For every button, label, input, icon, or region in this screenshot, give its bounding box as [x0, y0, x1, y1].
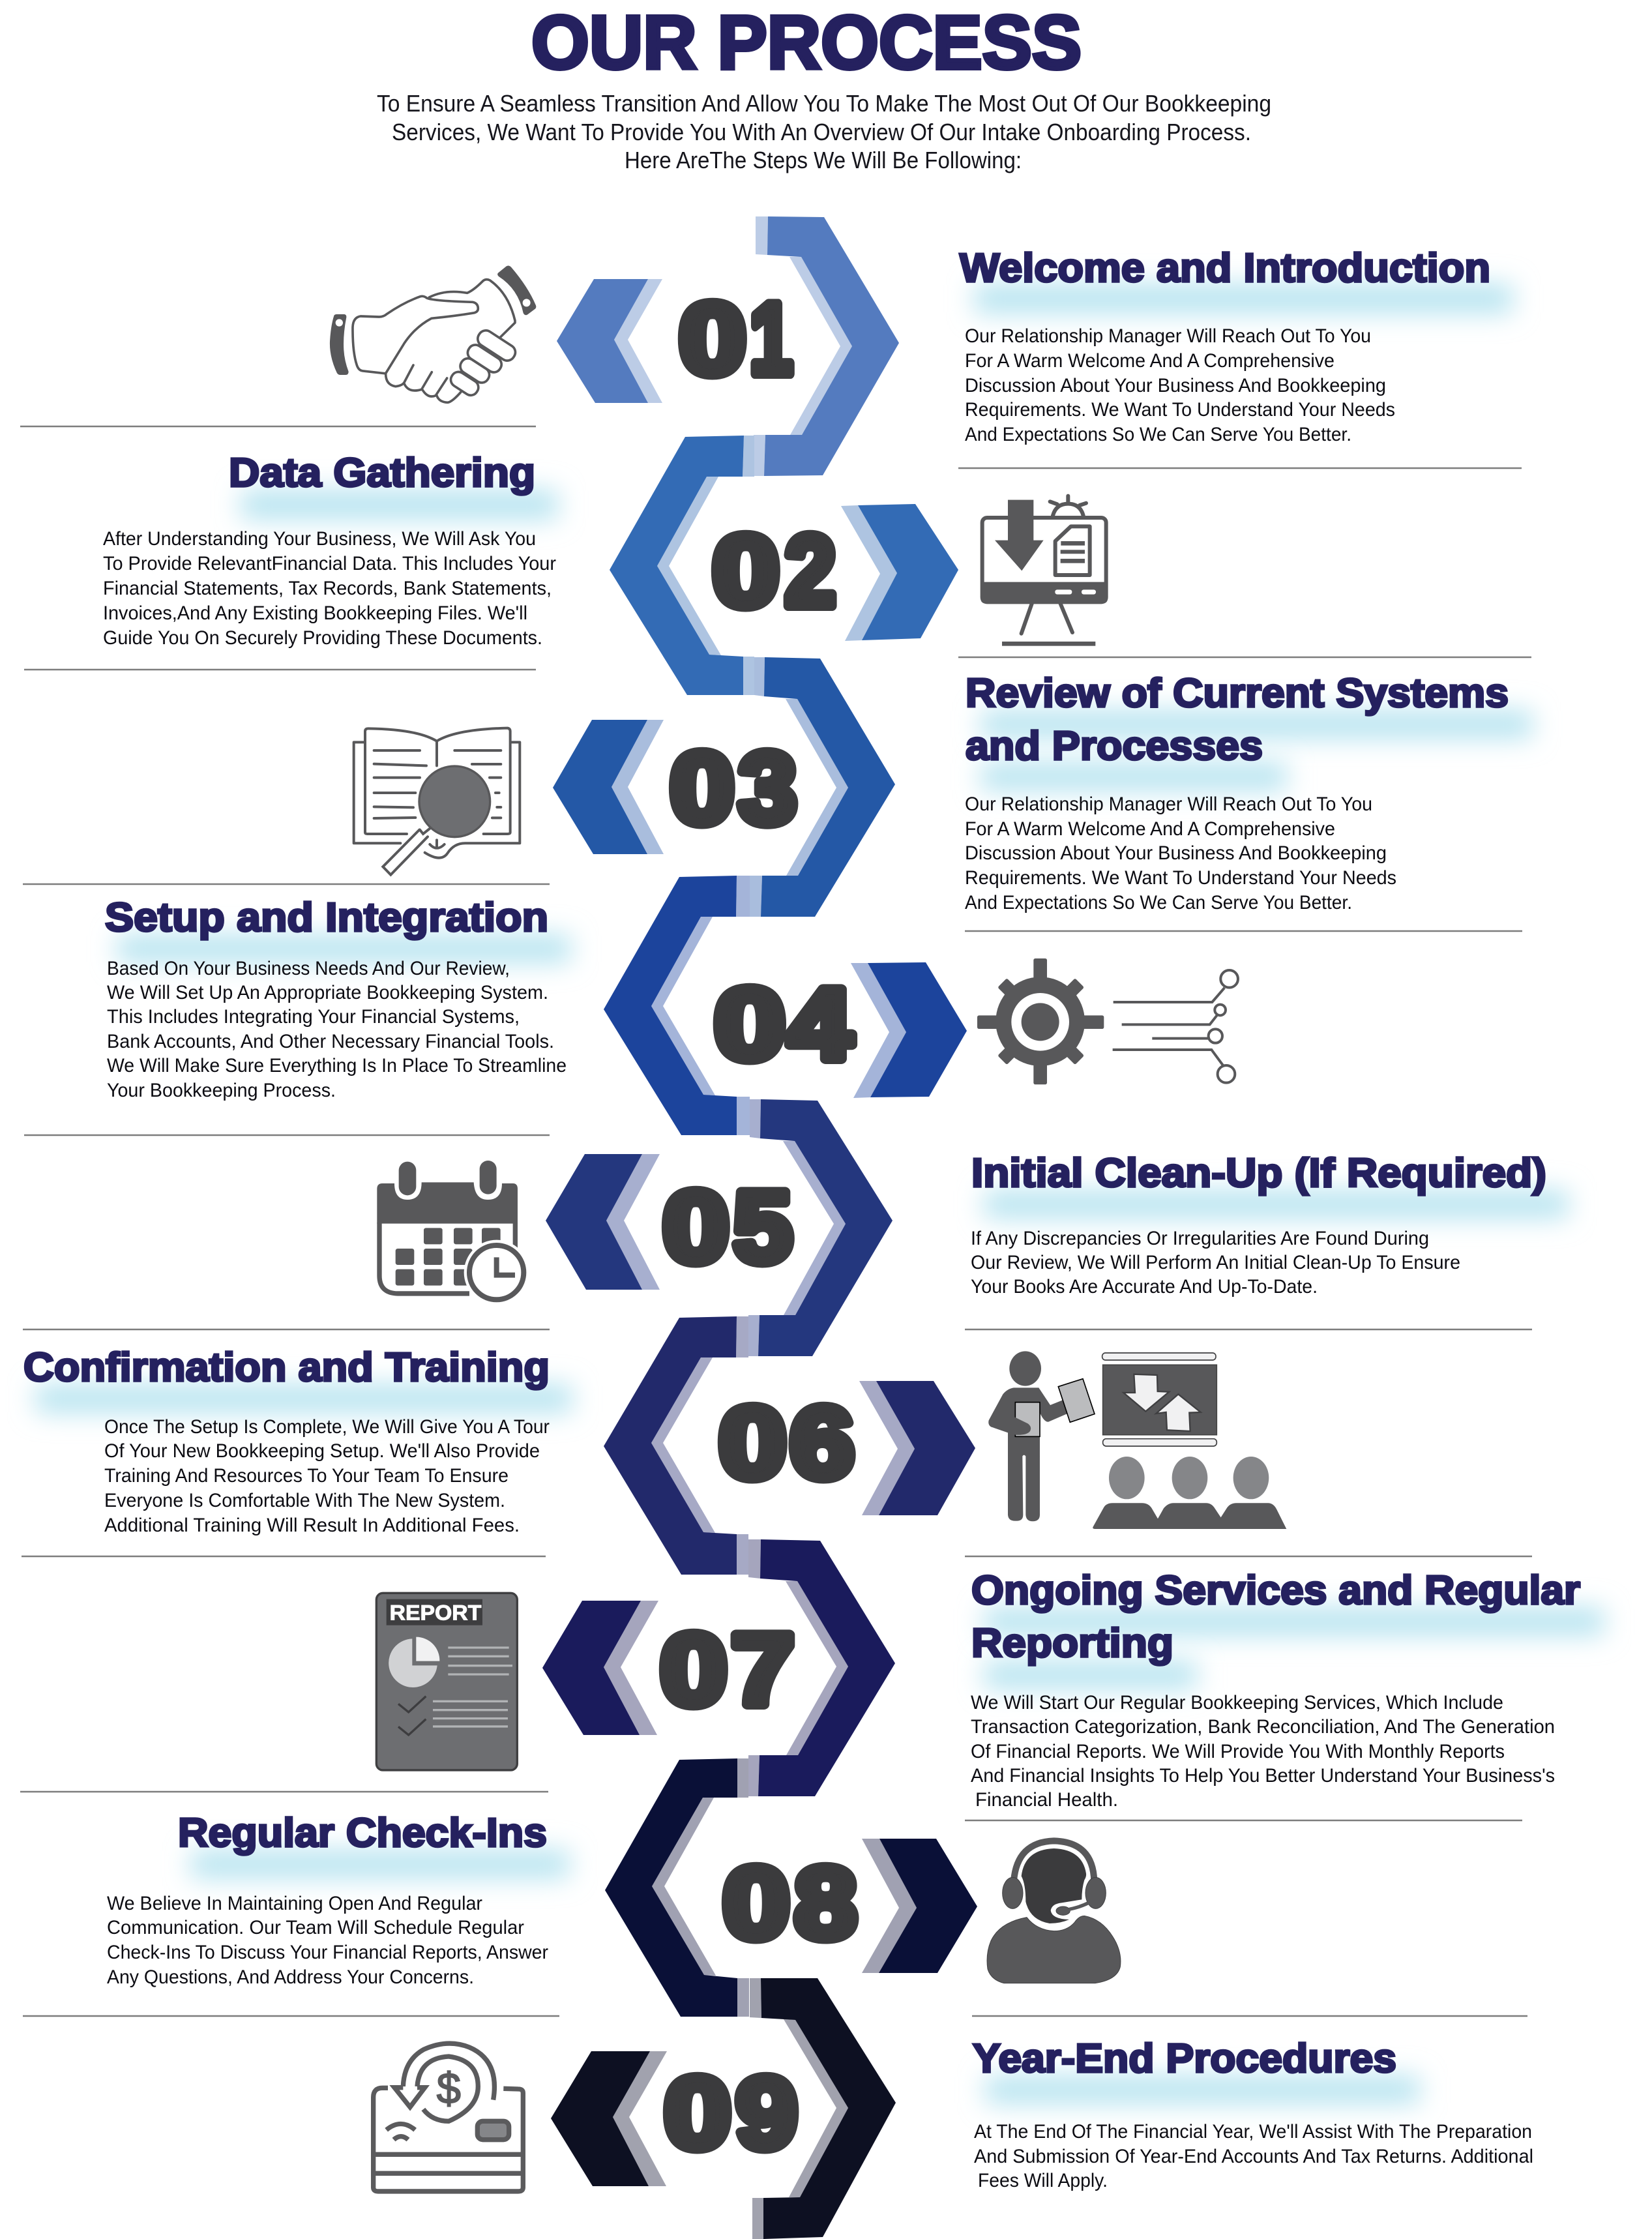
body: data gathering: To Provide RelevantFinancial Data. This Includes Your — [103, 553, 556, 574]
body: data gathering: Guide You On Securely Providing These Documents. — [103, 627, 542, 649]
body: confirmation: Additional Training Will Result In Additional Fees. — [104, 1515, 520, 1536]
heading: confirmation — [23, 1345, 572, 1412]
number 07: 7 — [731, 1613, 794, 1726]
heading: ongoing services — [971, 1568, 1604, 1689]
heading: check-ins — [178, 1811, 569, 1878]
body: setup: Your Bookkeeping Process. — [107, 1080, 336, 1101]
body: check-ins — [107, 1893, 548, 1988]
body: year-end — [974, 2121, 1533, 2191]
icon: presentation board — [981, 496, 1108, 646]
icon: handshake — [330, 265, 536, 402]
body: year-end: Fees Will Apply. — [978, 2170, 1108, 2191]
band 08 — [605, 1758, 749, 2017]
body: review: Our Relationship Manager Will Reach Out To You — [965, 793, 1372, 815]
body: setup — [107, 958, 567, 1101]
chevron 01 — [557, 279, 662, 403]
number 01: 0 — [679, 282, 746, 395]
icon: trainer with audience — [988, 1351, 1286, 1529]
band 09 — [750, 1978, 896, 2239]
heading: setup — [105, 895, 570, 962]
body: data gathering — [103, 528, 556, 649]
body: confirmation: Training And Resources To Your Team To Ensure — [104, 1465, 509, 1487]
chevron 06 — [859, 1381, 975, 1515]
icon: book and magnifier — [354, 728, 520, 875]
heading: welcome: Welcome and Introduction — [960, 246, 1490, 291]
number 03 — [670, 732, 797, 844]
number 05 — [663, 1170, 792, 1283]
chevron 09 — [551, 2051, 667, 2186]
icon: gear and circuit lines — [977, 958, 1238, 1084]
body: confirmation: Everyone Is Comfortable With The New System. — [104, 1490, 505, 1511]
title: OUR PROCESS — [531, 0, 1082, 85]
band 02 — [610, 436, 754, 695]
heading: data gathering: Data Gathering — [229, 451, 535, 496]
band 03 — [750, 657, 895, 917]
band 07 — [748, 1539, 895, 1796]
chevron 05 — [546, 1154, 660, 1290]
number 02: 2 — [785, 514, 836, 627]
body: ongoing services: Transaction Categorization, Bank Reconciliation, And The Generation — [971, 1716, 1555, 1738]
step 03 — [354, 671, 1532, 913]
step 04 — [105, 895, 1238, 1101]
body: check-ins: Communication. Our Team Will Schedule Regular — [107, 1917, 524, 1938]
heading: setup: Setup and Integration — [105, 895, 548, 940]
number 07: 0 — [660, 1613, 727, 1726]
chevron 03 — [553, 720, 664, 854]
body: clean-up — [971, 1228, 1460, 1297]
intro text — [377, 90, 1271, 173]
body: ongoing services: And Financial Insights To Help You Better Understand Your Business's — [971, 1765, 1555, 1787]
body: review: And Expectations So We Can Serve You Better. — [965, 892, 1352, 913]
body: welcome: Our Relationship Manager Will Reach Out To You — [965, 325, 1371, 347]
heading: welcome — [960, 246, 1512, 313]
step 02 — [103, 451, 1108, 649]
chevron 04 — [851, 962, 967, 1098]
intro text: Here AreThe Steps We Will Be Following: — [625, 147, 1022, 173]
number 02 — [713, 514, 836, 627]
intro text: Services, We Want To Provide You With An Overview Of Our Intake Onboarding Process. — [392, 119, 1251, 145]
band 04 — [604, 876, 750, 1135]
body: setup: Bank Accounts, And Other Necessary Financial Tools. — [107, 1031, 554, 1052]
body: clean-up: Our Review, We Will Perform An Initial Clean-Up To Ensure — [971, 1252, 1460, 1273]
number 01: 1 — [750, 282, 793, 395]
body: data gathering: Invoices,And Any Existing Bookkeeping Files. We'll — [103, 602, 527, 624]
number 05: 0 — [663, 1170, 729, 1283]
body: ongoing services: Financial Health. — [975, 1789, 1118, 1811]
heading: year-end: Year-End Procedures — [973, 2036, 1396, 2081]
body: welcome: Discussion About Your Business And Bookkeeping — [965, 375, 1386, 396]
body: ongoing services — [971, 1692, 1555, 1811]
step 05 — [377, 1151, 1568, 1305]
heading: review — [966, 671, 1532, 790]
body: welcome: Requirements. We Want To Understand Your Needs — [965, 399, 1395, 421]
chevron 02 — [841, 504, 958, 641]
body: review — [965, 793, 1396, 913]
body: welcome: For A Warm Welcome And A Comprehensive — [965, 350, 1335, 372]
band 01 — [754, 216, 899, 476]
icon: card with dollar refund: $ — [437, 2065, 461, 2113]
number 08: 8 — [795, 1846, 857, 1959]
number 04 — [715, 968, 852, 1080]
number 09: 0 — [664, 2056, 731, 2169]
body: year-end: At The End Of The Financial Year, We'll Assist With The Preparation — [974, 2121, 1532, 2143]
body: data gathering: Financial Statements, Tax Records, Bank Statements, — [103, 578, 552, 599]
number 08: 0 — [723, 1846, 789, 1959]
icon: calendar and clock — [377, 1161, 529, 1305]
number 04: 0 — [715, 968, 785, 1080]
number 05: 5 — [733, 1170, 792, 1283]
step 08 — [107, 1811, 1121, 1988]
zigzag ribbon — [604, 216, 899, 2239]
body: ongoing services: We Will Start Our Regular Bookkeeping Services, Which Include — [971, 1692, 1503, 1713]
band 06 — [604, 1316, 748, 1575]
body: review: For A Warm Welcome And A Comprehensive — [965, 818, 1335, 840]
body: setup: We Will Set Up An Appropriate Bookkeeping System. — [107, 982, 548, 1003]
heading: ongoing services: Ongoing Services and Regular — [971, 1568, 1580, 1613]
body: confirmation: Of Your New Bookkeeping Setup. We'll Also Provide — [104, 1440, 540, 1462]
band 05 — [748, 1099, 892, 1356]
number 03: 0 — [670, 732, 734, 844]
body: clean-up: If Any Discrepancies Or Irregularities Are Found During — [971, 1228, 1429, 1249]
body: check-ins: We Believe In Maintaining Open And Regular — [107, 1893, 482, 1914]
step 09 — [374, 2036, 1533, 2191]
chevron 08 — [862, 1839, 977, 1973]
icon: report document: REPORT — [390, 1601, 482, 1624]
icon: card with dollar refund — [374, 2043, 523, 2191]
step 01 — [330, 246, 1512, 445]
heading: check-ins: Regular Check-Ins — [178, 1811, 547, 1856]
number 06 — [719, 1386, 854, 1499]
chevron 07 — [542, 1601, 658, 1735]
number 04: 4 — [788, 968, 852, 1080]
heading: clean-up — [971, 1151, 1568, 1218]
icon: support agent headset — [987, 1841, 1121, 1983]
step 06 — [23, 1345, 1286, 1536]
number 09: 9 — [736, 2056, 797, 2169]
number 08 — [723, 1846, 857, 1959]
number 06: 0 — [719, 1386, 786, 1499]
body: review: Requirements. We Want To Understand Your Needs — [965, 867, 1396, 889]
body: data gathering: After Understanding Your Business, We Will Ask You — [103, 528, 536, 550]
body: setup: This Includes Integrating Your Financial Systems, — [107, 1006, 520, 1028]
heading: clean-up: Initial Clean-Up (If Required) — [971, 1151, 1546, 1196]
intro text: To Ensure A Seamless Transition And Allow You To Make The Most Out Of Our Bookkeeping — [377, 90, 1271, 117]
body: clean-up: Your Books Are Accurate And Up-To-Date. — [971, 1276, 1318, 1297]
step 07 — [376, 1568, 1604, 1811]
heading: data gathering — [229, 451, 557, 519]
number 07 — [660, 1613, 794, 1726]
number 01 — [679, 282, 793, 395]
body: confirmation: Once The Setup Is Complete, We Will Give You A Tour — [104, 1416, 550, 1438]
body: check-ins: Check-Ins To Discuss Your Financial Reports, Answer — [107, 1942, 548, 1963]
body: setup: Based On Your Business Needs And Our Review, — [107, 958, 510, 979]
heading: year-end — [973, 2036, 1419, 2103]
body: confirmation — [104, 1416, 550, 1536]
heading: ongoing services: Reporting — [971, 1621, 1173, 1666]
body: review: Discussion About Your Business And Bookkeeping — [965, 842, 1387, 864]
number 06: 6 — [790, 1386, 854, 1499]
heading: confirmation: Confirmation and Training — [23, 1345, 550, 1390]
body: welcome — [965, 325, 1395, 445]
body: check-ins: Any Questions, And Address Your Concerns. — [107, 1966, 474, 1988]
number 03: 3 — [739, 732, 797, 844]
heading: review: Review of Current Systems — [966, 671, 1509, 716]
body: ongoing services: Of Financial Reports. We Will Provide You With Monthly Reports — [971, 1741, 1505, 1762]
body: year-end: And Submission Of Year-End Accounts And Tax Returns. Additional — [974, 2146, 1533, 2167]
body: welcome: And Expectations So We Can Serve You Better. — [965, 424, 1351, 445]
icon: report document — [376, 1593, 517, 1770]
number 09 — [664, 2056, 797, 2169]
body: setup: We Will Make Sure Everything Is In Place To Streamline — [107, 1055, 567, 1076]
heading: review: and Processes — [966, 724, 1263, 769]
number 02: 0 — [713, 514, 779, 627]
